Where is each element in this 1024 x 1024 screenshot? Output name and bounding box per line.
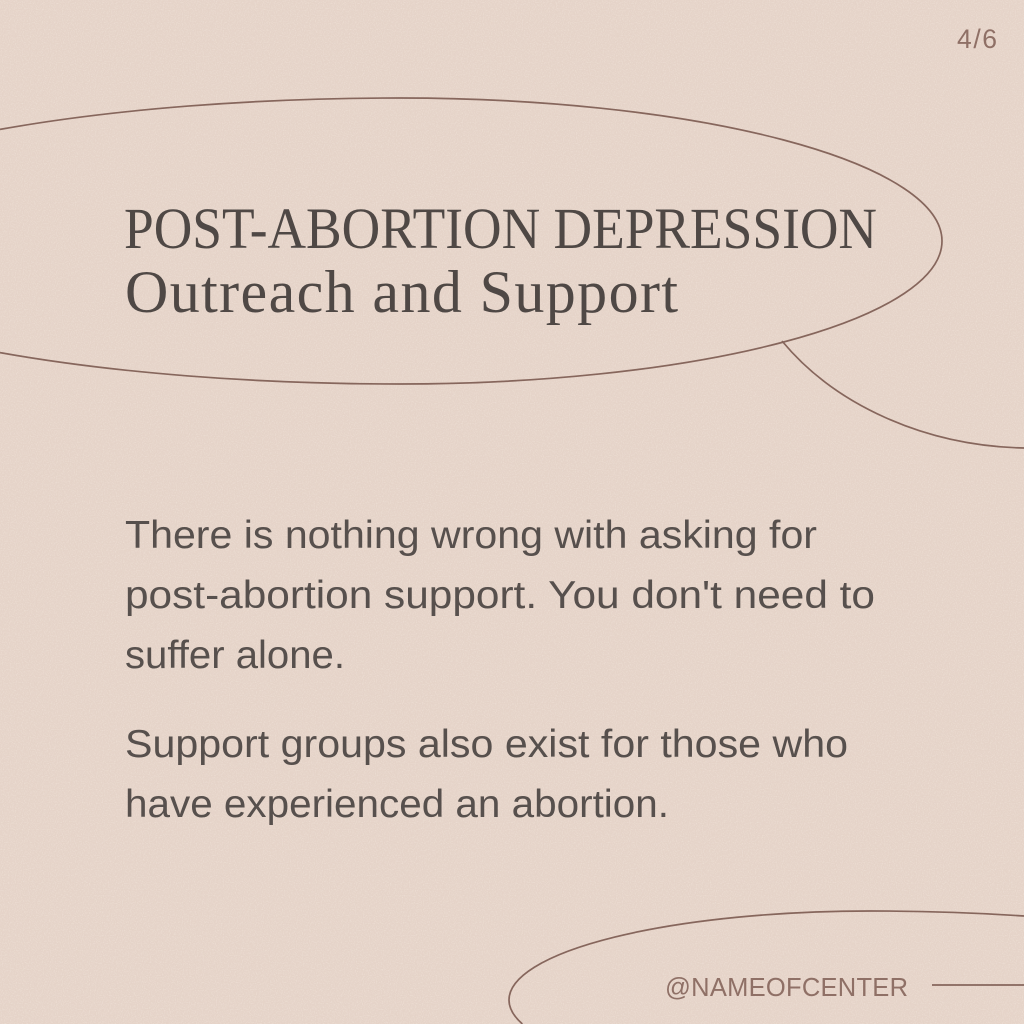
title: POST-ABORTION DEPRESSION [124, 196, 877, 261]
paragraph 2: have experienced an abortion. [125, 783, 669, 826]
subtitle: Outreach and Support [125, 259, 678, 325]
paragraph 2: Support groups also exist for those who [125, 723, 848, 766]
handle: @NAMEOFCENTER [665, 974, 908, 1002]
paragraph 1: suffer alone. [125, 634, 345, 677]
page number: 4/6 [957, 24, 997, 54]
speech bubble tail curve [782, 341, 1024, 448]
paragraph 1: post-abortion support. You don't need to [125, 574, 875, 617]
paragraph 1 [125, 514, 875, 677]
speech bubble outline: footer [509, 911, 1024, 1024]
footer rule [932, 984, 1024, 986]
speech bubble outline: title [0, 98, 942, 384]
paragraph 1: There is nothing wrong with asking for [125, 514, 817, 557]
paragraph 2 [125, 723, 848, 826]
